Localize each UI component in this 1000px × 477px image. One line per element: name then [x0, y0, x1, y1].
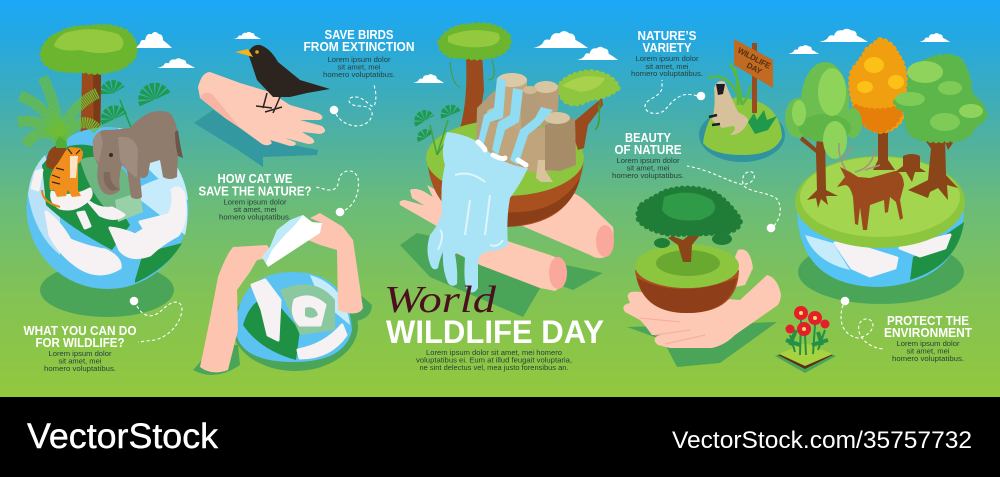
- text block: nature's variety: VARIETY: [642, 41, 692, 55]
- lower hand and upper hand: [400, 185, 614, 291]
- text block: save birds: homero voluptatibus.: [323, 70, 395, 79]
- text block: beauty of nature: [612, 131, 684, 180]
- text block: beauty of nature: OF NATURE: [614, 143, 682, 157]
- text block: protect the environment: [884, 314, 972, 363]
- text block: how cat we save the nature: Lorem ipsum dolor: [224, 198, 287, 206]
- title: WILDLIFE DAY: [386, 314, 604, 350]
- tree one: [440, 25, 509, 128]
- text block: main description: [416, 348, 572, 372]
- text block: what you can do: [24, 324, 137, 373]
- text block: beauty of nature: Lorem ipsum dolor: [616, 156, 680, 165]
- island top: [426, 120, 584, 196]
- waterfalls: [478, 78, 553, 165]
- text block: what you can do: WHAT YOU CAN DO: [24, 324, 137, 338]
- wooden sign board: [734, 39, 773, 88]
- tree stump: [895, 154, 926, 182]
- footer image id: VectorStock.com/35757732: [672, 427, 972, 454]
- island top: [635, 244, 739, 288]
- fan palm leaves: [106, 87, 163, 130]
- monkey: [709, 81, 748, 135]
- text block: how cat we save the nature: homero voluptatibus.: [219, 212, 291, 222]
- text block: save birds: sit amet, mei: [338, 62, 381, 72]
- tiger: [42, 147, 83, 207]
- dashed connector: what you can do: [130, 297, 182, 342]
- earth globe: [26, 127, 188, 289]
- tree: [42, 27, 135, 160]
- palm tree: [18, 77, 98, 170]
- hand shadow: [194, 110, 318, 167]
- title: World: [384, 279, 497, 321]
- small globe: [235, 272, 352, 362]
- text block: main description: Lorem ipsum dolor sit amet, mei homero: [426, 348, 562, 357]
- illustration: small tree island on hand: [623, 188, 781, 367]
- text block: protect the environment: homero voluptatibus.: [892, 354, 964, 363]
- blackbird: [235, 45, 330, 113]
- island top: [795, 156, 965, 248]
- text block: how cat we save the nature: [198, 172, 312, 222]
- footer brand: VectorStock: [27, 417, 219, 456]
- text block: protect the environment: ENVIRONMENT: [884, 326, 972, 340]
- globe hemisphere: [797, 212, 964, 287]
- dashed connector: beauty of nature: [687, 166, 780, 232]
- left arm: [200, 245, 275, 372]
- illustration: red flowers on tile: [775, 306, 836, 373]
- text block: nature's variety: Lorem ipsum dolor: [636, 54, 699, 63]
- wooden sign board: WILDLIFE: [736, 46, 773, 71]
- text block: protect the environment: PROTECT THE: [887, 314, 969, 328]
- grass tuft: [708, 63, 750, 105]
- ground shadow: [232, 281, 358, 371]
- text block: nature's variety: homero voluptatibus.: [631, 69, 703, 78]
- soil bowl: [427, 158, 584, 227]
- sign post: [752, 43, 757, 113]
- bowl soil: [635, 270, 739, 313]
- wooden sign board: DAY: [745, 61, 764, 77]
- fern plant: [419, 110, 456, 155]
- dashed connector: nature's variety: [645, 80, 705, 113]
- lower water stream: [428, 132, 528, 292]
- text block: how cat we save the nature: HOW CAT WE: [218, 172, 292, 186]
- text block: save birds: Lorem ipsum dolor: [328, 55, 391, 64]
- text block: beauty of nature: sit amet, mei: [626, 164, 670, 172]
- text block: save birds: SAVE BIRDS: [324, 28, 394, 42]
- palm hand: [623, 275, 781, 348]
- footer bar: [0, 397, 1000, 477]
- top hand: [720, 249, 753, 290]
- text block: protect the environment: Lorem ipsum dolor: [896, 339, 960, 348]
- text block: what you can do: homero voluptatibus.: [44, 364, 116, 373]
- flower heads: [786, 306, 830, 336]
- text block: save birds: FROM EXTINCTION: [304, 40, 414, 54]
- deer: [837, 143, 904, 230]
- hand shadow: [627, 322, 777, 367]
- text block: main description: ne sint delectus vel, mea justo forensibus an.: [420, 363, 568, 372]
- text block: main description: voluptatibus ei. Eum at illud feugait voluptaria,: [416, 356, 572, 364]
- text block: what you can do: sit amet, mei: [58, 356, 102, 366]
- right arm: [308, 213, 363, 314]
- elephant: [93, 111, 183, 199]
- text block: nature's variety: [631, 29, 703, 78]
- text block: nature's variety: NATURE’S: [638, 29, 696, 43]
- illustration: monkey island and wildlife sign: [699, 39, 785, 162]
- text block: protect the environment: sit amet, mei: [906, 346, 950, 356]
- text block: save birds: [304, 28, 414, 79]
- text block: beauty of nature: homero voluptatibus.: [612, 171, 684, 180]
- white base under tiger: [52, 189, 91, 209]
- text block: what you can do: FOR WILDLIFE?: [36, 336, 124, 350]
- illustration: central island with waterfall on hands: [400, 25, 618, 317]
- orange tree: [851, 40, 905, 170]
- illustration: globe with tree, elephant and tiger: [18, 27, 188, 317]
- dashed connector: save birds: [330, 85, 376, 126]
- right tree: [895, 56, 985, 200]
- dashed connector: how can we: [316, 171, 358, 216]
- text block: beauty of nature: BEAUTY: [625, 131, 672, 145]
- tree two: [558, 72, 618, 150]
- hand: [198, 72, 325, 146]
- text block: how cat we save the nature: sit amet, mei: [234, 205, 277, 214]
- illustration: protect the environment island with forest: [785, 40, 985, 304]
- hand shadow: [400, 233, 603, 317]
- small monkey: [536, 160, 553, 182]
- rock formation: [476, 73, 576, 172]
- fern: [748, 110, 777, 134]
- illustration: hand holding bird: [194, 45, 330, 167]
- island: [699, 108, 785, 162]
- title: [384, 279, 604, 350]
- text block: nature's variety: sit amet, mei: [646, 62, 689, 71]
- decorative clouds: [133, 29, 950, 83]
- text block: how cat we save the nature: SAVE THE NATURE?: [198, 184, 312, 198]
- tree: [638, 188, 740, 262]
- held cloud: [262, 215, 322, 267]
- text block: what you can do: Lorem ipsum dolor: [48, 349, 112, 358]
- dashed connector: protect the environment: [841, 297, 884, 349]
- flower stems and leaves: [786, 320, 828, 355]
- left tree: [785, 62, 862, 208]
- illustration: hands wrapping globe in a cloud: [193, 213, 372, 375]
